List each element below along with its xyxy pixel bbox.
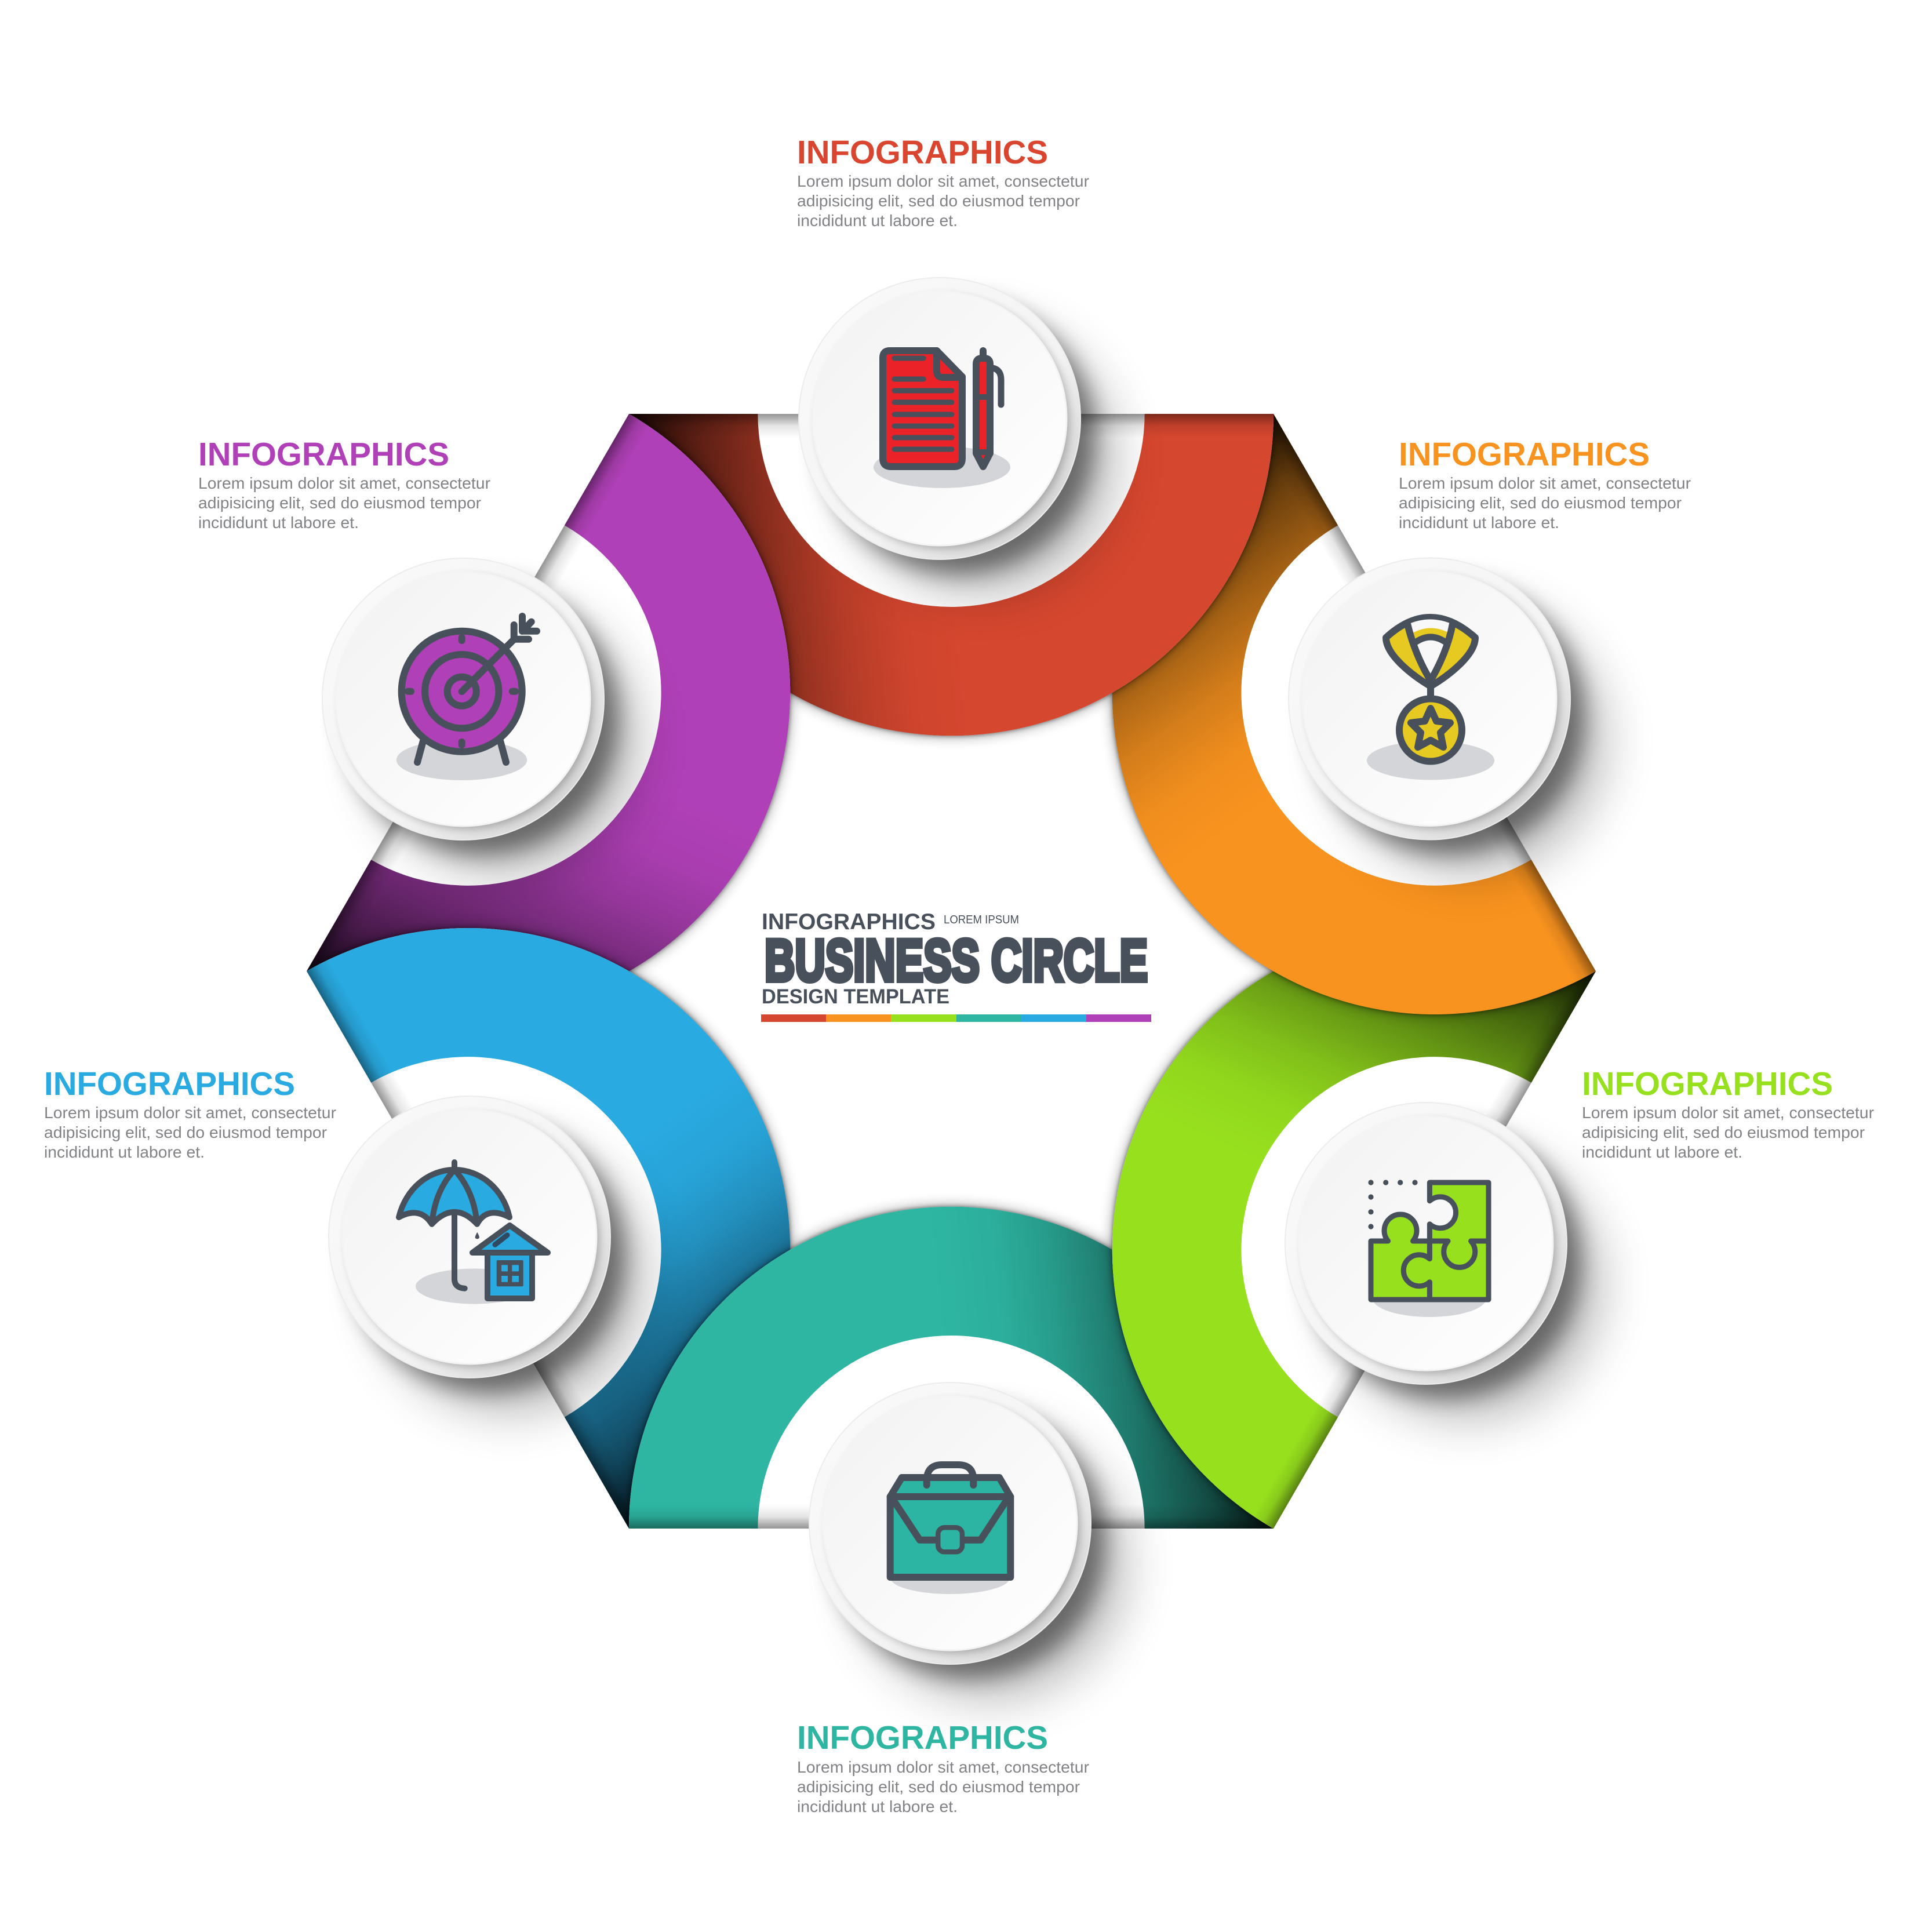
circle: briefcase — [809, 1382, 1123, 1696]
title: business circle: BUSINESS CIRCLE — [765, 927, 1148, 994]
callout: right green — [1582, 1065, 1874, 1161]
body text: adipisicing elit, sed do eiusmod tempor — [198, 494, 481, 512]
heading: INFOGRAPHICS — [1582, 1065, 1833, 1103]
heading: INFOGRAPHICS — [797, 134, 1048, 171]
icon: puzzle pieces — [1368, 1180, 1489, 1317]
body text — [797, 1758, 1089, 1815]
body text — [198, 474, 490, 532]
title: infographics: INFOGRAPHICS — [762, 909, 936, 934]
body text: adipisicing elit, sed do eiusmod tempor — [1399, 494, 1682, 512]
heading: INFOGRAPHICS — [44, 1065, 295, 1103]
callout: top red — [797, 134, 1089, 230]
circle: puzzle — [1285, 1103, 1599, 1416]
icon: briefcase — [890, 1465, 1010, 1594]
arc: teal — [629, 1207, 1274, 1529]
body text: Lorem ipsum dolor sit amet, consectetur — [1582, 1104, 1874, 1122]
heading: INFOGRAPHICS — [797, 1719, 1048, 1756]
arc: orange overlap above green — [994, 414, 1596, 1132]
arc: purple — [307, 414, 799, 980]
body text — [1399, 474, 1691, 532]
callout: bottom teal — [797, 1719, 1089, 1815]
heading: INFOGRAPHICS — [198, 436, 449, 473]
callout: left blue — [44, 1065, 336, 1161]
body text: incididunt ut labore et. — [198, 514, 359, 532]
body text: incididunt ut labore et. — [44, 1143, 205, 1161]
body text: incididunt ut labore et. — [1399, 514, 1559, 532]
circle: medal — [1289, 558, 1602, 872]
body text: incididunt ut labore et. — [1582, 1143, 1742, 1161]
arc: orange — [1104, 414, 1596, 980]
circle: umbrella and house — [329, 1096, 642, 1410]
body text: Lorem ipsum dolor sit amet, consectetur — [797, 1758, 1089, 1776]
icon: medal with star — [1367, 617, 1494, 780]
arc: red — [629, 414, 1274, 736]
center title block — [761, 909, 1151, 1022]
body text: Lorem ipsum dolor sit amet, consectetur — [198, 474, 490, 492]
body text: adipisicing elit, sed do eiusmod tempor — [1582, 1123, 1865, 1141]
body text — [1582, 1104, 1874, 1161]
callout: left purple — [198, 436, 490, 532]
arc: green — [994, 810, 1596, 1529]
body text: incididunt ut labore et. — [797, 1798, 958, 1815]
body text: adipisicing elit, sed do eiusmod tempor — [797, 1778, 1080, 1796]
body text: Lorem ipsum dolor sit amet, consectetur — [1399, 474, 1691, 492]
subtitle: lorem ipsum: LOREM IPSUM — [944, 914, 1019, 926]
color bar — [761, 1014, 1151, 1022]
body text: adipisicing elit, sed do eiusmod tempor — [44, 1123, 327, 1141]
hexagon ring of overlapping arcs — [307, 414, 1596, 1529]
body text: Lorem ipsum dolor sit amet, consectetur — [797, 172, 1089, 190]
circle: target — [322, 558, 636, 872]
body text: Lorem ipsum dolor sit amet, consectetur — [44, 1104, 336, 1122]
icon: document and pen — [874, 351, 1010, 488]
arc: blue — [307, 922, 799, 1529]
icon: target with arrow — [396, 616, 537, 780]
body text: incididunt ut labore et. — [797, 212, 958, 230]
heading: INFOGRAPHICS — [1399, 436, 1650, 473]
body text — [44, 1104, 336, 1161]
icon: umbrella and house — [399, 1162, 548, 1304]
title: design template: DESIGN TEMPLATE — [762, 985, 949, 1008]
body text — [797, 172, 1089, 230]
circle: document — [799, 278, 1112, 591]
callout: right orange — [1399, 436, 1691, 532]
body text: adipisicing elit, sed do eiusmod tempor — [797, 192, 1080, 210]
